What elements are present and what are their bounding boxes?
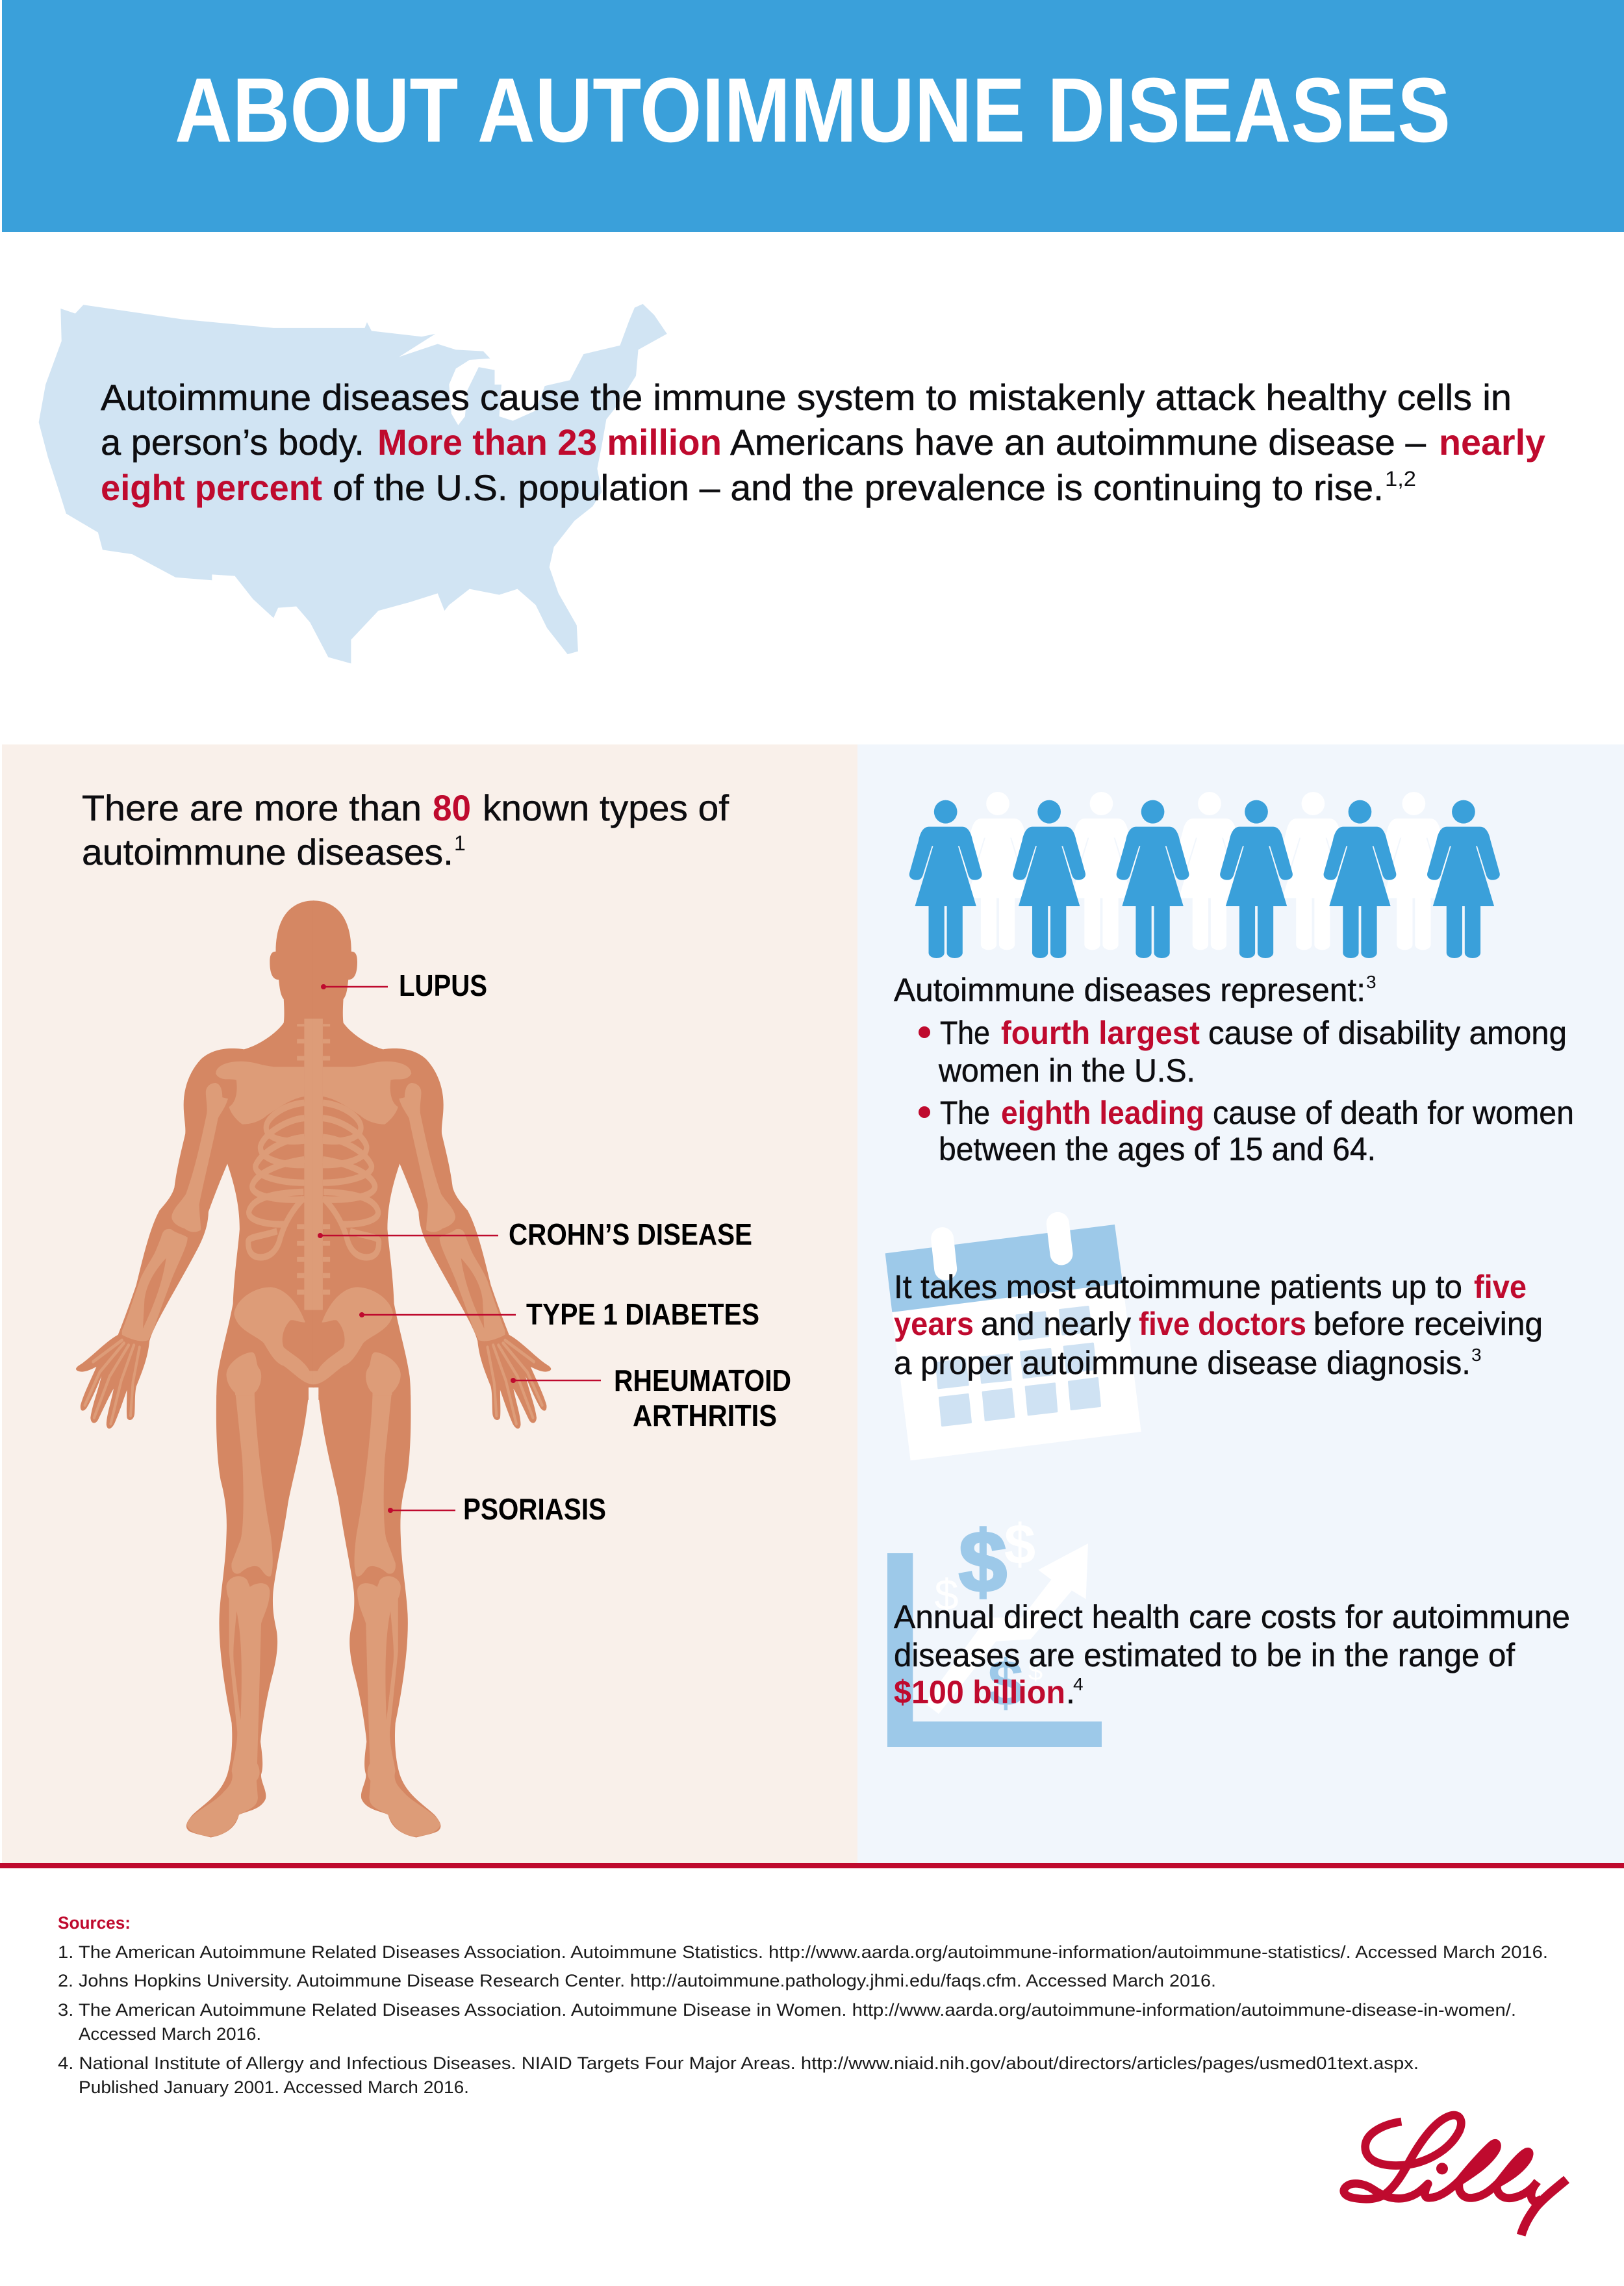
icon: rising cost chart: $	[1004, 1513, 1035, 1576]
sources: 4. National Institute of Allergy and Infectious Diseases. NIAID Targets Four Major Areas. http://www.niaid.nih.gov/about/directors/articles/pages/usmed01text.aspx.	[58, 2053, 1419, 2073]
icon: rising cost chart: $	[959, 1514, 1007, 1610]
panel heading	[82, 787, 729, 872]
icon: calendar	[885, 1223, 1141, 1460]
text block: disability and death statistics: The	[940, 1095, 990, 1131]
panel heading: known types of	[483, 787, 729, 828]
text block: annual costs: $100 billion	[894, 1674, 1065, 1710]
text block: annual costs: Annual direct health care costs for autoimmune	[894, 1599, 1570, 1635]
text block: diagnosis delay: 3	[1471, 1345, 1482, 1365]
callout: rheumatoid arthritis: ARTHRITIS	[633, 1399, 777, 1432]
panel heading: 1	[454, 832, 466, 855]
callout: type 1 diabetes	[359, 1297, 759, 1331]
text block: diagnosis delay: a proper autoimmune disease diagnosis.	[894, 1345, 1471, 1381]
callout: rheumatoid arthritis: RHEUMATOID	[614, 1364, 791, 1397]
sources: Accessed March 2016.	[79, 2024, 261, 2044]
text block: disability and death statistics: between the ages of 15 and 64.	[939, 1131, 1376, 1167]
text block: disability and death statistics: 3	[1366, 972, 1377, 992]
icon: rising cost chart	[887, 1513, 1102, 1747]
human body illustration	[76, 900, 551, 1838]
text block: disability and death statistics: cause of death for women	[1213, 1095, 1574, 1131]
text block: annual costs	[894, 1599, 1570, 1710]
intro paragraph: of the U.S. population – and the prevalence is continuing to rise.	[333, 467, 1384, 508]
panel: women and costs	[857, 744, 1624, 1863]
sources: Sources:	[58, 1913, 131, 1933]
title: ABOUT AUTOIMMUNE DISEASES	[175, 58, 1451, 161]
text block: diagnosis delay: and nearly	[981, 1306, 1131, 1342]
text block: diagnosis delay: before receiving	[1313, 1306, 1543, 1342]
text block: diagnosis delay: It takes most autoimmune patients up to	[894, 1269, 1462, 1305]
icon: row of women	[909, 792, 1500, 958]
text block: disability and death statistics: cause of disability among	[1208, 1015, 1567, 1051]
panel heading: There are more than	[82, 787, 422, 828]
text block: diagnosis delay	[894, 1269, 1543, 1381]
text block: disability and death statistics	[894, 972, 1574, 1167]
header banner	[2, 0, 1624, 232]
callout: psoriasis: PSORIASIS	[463, 1492, 606, 1526]
intro paragraph: Americans have an autoimmune disease –	[730, 422, 1427, 463]
text block: disability and death statistics: fourth largest	[1001, 1015, 1200, 1051]
text block: annual costs: 4	[1073, 1674, 1084, 1694]
sources: 2. Johns Hopkins University. Autoimmune Disease Research Center. http://autoimmune.pathology.jhmi.edu/faqs.cfm. Accessed March 2016.	[58, 1971, 1216, 1990]
text block: disability and death statistics: Autoimmune diseases represent:	[894, 972, 1365, 1008]
intro paragraph: nearly	[1439, 422, 1545, 463]
intro paragraph: More than 23 million	[377, 422, 722, 463]
intro paragraph: a person’s body.	[101, 422, 364, 463]
panel heading: 80	[433, 787, 471, 828]
text block: disability and death statistics: women in the U.S.	[938, 1052, 1195, 1089]
intro paragraph: 1,2	[1385, 467, 1416, 490]
icon: rising cost chart: $	[987, 1647, 1024, 1720]
callout: type 1 diabetes: TYPE 1 DIABETES	[526, 1297, 759, 1331]
sources	[58, 1913, 1548, 2097]
intro paragraph	[101, 377, 1545, 508]
callout: crohn's disease	[318, 1217, 752, 1251]
callout: lupus: LUPUS	[399, 969, 487, 1002]
text block: disability and death statistics: eighth leading	[1001, 1095, 1204, 1131]
icon: rising cost chart: $	[934, 1571, 959, 1619]
text block: diagnosis delay: five	[1474, 1269, 1527, 1305]
text block: annual costs: diseases are estimated to be in the range of	[894, 1637, 1515, 1673]
text block: diagnosis delay: years	[894, 1306, 974, 1342]
intro paragraph: eight percent	[101, 467, 322, 508]
text block: disability and death statistics: The	[940, 1015, 990, 1051]
intro paragraph: Autoimmune diseases cause the immune system to mistakenly attack healthy cells in	[101, 377, 1512, 418]
text block: annual costs: .	[1066, 1674, 1075, 1710]
map: United States silhouette	[39, 304, 667, 663]
callout: crohn's disease: CROHN’S DISEASE	[509, 1217, 752, 1251]
icon: rising cost chart: $	[1028, 1657, 1043, 1686]
sources: 1. The American Autoimmune Related Diseases Association. Autoimmune Statistics. http://www.aarda.org/autoimmune-information/autoimmune-statistics/. Accessed March 2016.	[58, 1942, 1548, 1962]
panel: types of autoimmune diseases	[2, 744, 857, 1863]
sources: Published January 2001. Accessed March 2016.	[79, 2077, 469, 2097]
callout: rheumatoid arthritis	[511, 1364, 791, 1432]
sources: 3. The American Autoimmune Related Diseases Association. Autoimmune Disease in Women. http://www.aarda.org/autoimmune-information/autoimmune-disease-in-women/.	[58, 2000, 1516, 2020]
callout: psoriasis	[388, 1492, 606, 1526]
callout: lupus	[321, 969, 487, 1002]
panel heading: autoimmune diseases.	[82, 832, 453, 872]
text block: diagnosis delay: five doctors	[1139, 1306, 1306, 1342]
logo: Lilly script	[1344, 2115, 1567, 2235]
